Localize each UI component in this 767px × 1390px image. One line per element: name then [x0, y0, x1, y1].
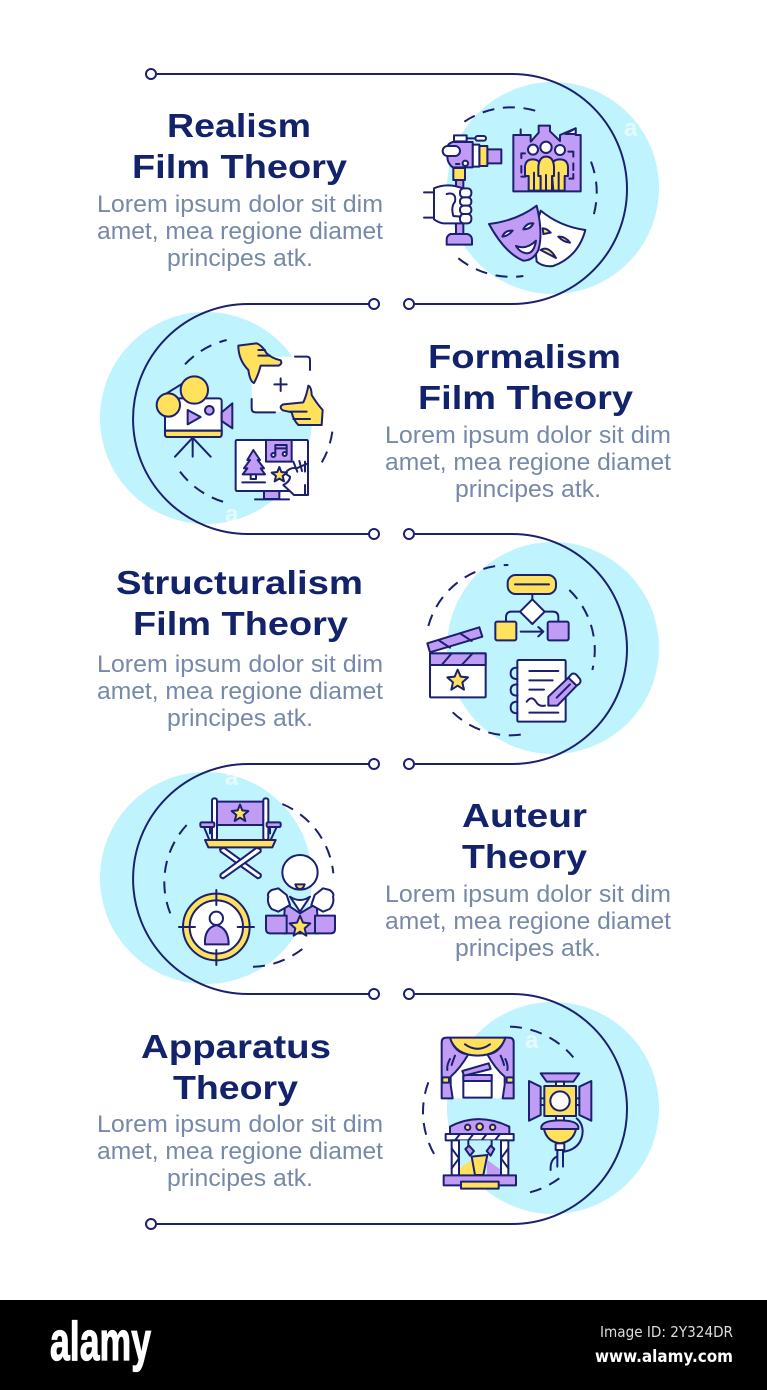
heading — [132, 107, 348, 185]
icon: spotlight — [529, 1073, 591, 1170]
icon: building with audience — [513, 126, 581, 191]
icon: notebook and pencil — [511, 660, 581, 722]
watermarks — [225, 115, 638, 1054]
background circle — [100, 772, 312, 984]
panel: formalism film theory — [100, 299, 671, 539]
watermarks: a — [225, 501, 239, 528]
body text: Lorem ipsum dolor sit dim — [97, 651, 383, 678]
body text — [97, 651, 383, 732]
icon: flowchart — [495, 575, 569, 640]
heading: Film Theory — [418, 379, 634, 416]
connector line — [404, 529, 627, 769]
heading: Film Theory — [132, 148, 348, 185]
watermarks: a — [525, 1027, 539, 1054]
heading: Film Theory — [133, 605, 349, 642]
icon: theatre curtains with clapper — [442, 1038, 514, 1098]
body text: amet, mea regione diamet — [97, 678, 383, 705]
connector line — [133, 759, 379, 999]
background circle — [447, 542, 659, 754]
icon: person with star — [266, 855, 335, 936]
body text — [385, 422, 671, 503]
panel: apparatus theory — [97, 989, 659, 1229]
body text: Lorem ipsum dolor sit dim — [385, 881, 671, 908]
watermarks: a — [225, 764, 239, 791]
connector line — [146, 69, 627, 309]
image id: Image ID: 2Y324DR — [600, 1323, 733, 1341]
body text: Lorem ipsum dolor sit dim — [97, 1111, 383, 1138]
panel: structuralism film theory — [97, 529, 659, 769]
body text — [97, 1111, 383, 1192]
icon: movie camera on tripod — [157, 376, 232, 457]
icon: apparatus cluster — [423, 1027, 591, 1192]
body text: principes atk. — [455, 476, 601, 503]
body text: Lorem ipsum dolor sit dim — [385, 422, 671, 449]
heading: Theory — [173, 1069, 299, 1106]
connector line — [146, 989, 627, 1229]
background circle — [447, 1002, 659, 1214]
icon: monitor with media — [236, 440, 308, 499]
heading: Realism — [167, 107, 311, 144]
watermarks: a — [624, 115, 638, 142]
background circle — [447, 82, 659, 294]
body text: Lorem ipsum dolor sit dim — [97, 191, 383, 218]
icon: realism cluster — [424, 107, 597, 277]
heading — [418, 338, 634, 416]
heading — [462, 797, 588, 875]
icon: structuralism cluster — [427, 565, 595, 735]
body text: principes atk. — [167, 1165, 313, 1192]
heading: Theory — [462, 838, 588, 875]
alamy logo: alamy — [50, 1310, 151, 1372]
body text: amet, mea regione diamet — [97, 218, 383, 245]
heading — [141, 1028, 331, 1106]
heading: Structuralism — [116, 564, 363, 601]
body text: principes atk. — [455, 935, 601, 962]
panel: auteur theory — [100, 759, 671, 999]
heading — [116, 564, 363, 642]
connector line — [133, 299, 379, 539]
body text — [97, 191, 383, 272]
icon: video camera in hand — [424, 135, 501, 245]
body text: amet, mea regione diamet — [97, 1138, 383, 1165]
footer bar — [0, 1300, 767, 1390]
body text: amet, mea regione diamet — [385, 908, 671, 935]
body text: amet, mea regione diamet — [385, 449, 671, 476]
body text: principes atk. — [167, 705, 313, 732]
icon: auteur cluster — [164, 798, 335, 967]
icon: formalism cluster — [157, 340, 332, 502]
panel: realism film theory — [97, 69, 659, 309]
heading: Formalism — [428, 338, 621, 375]
heading: Apparatus — [141, 1028, 331, 1065]
icon: framing hands — [238, 343, 323, 425]
icon: concert stage — [444, 1119, 516, 1189]
background circle — [100, 312, 312, 524]
body text — [385, 881, 671, 962]
icon: theatre masks — [489, 206, 585, 266]
icon: clapperboard — [427, 627, 486, 697]
icon: target on person — [179, 890, 254, 965]
icon: director chair — [200, 798, 281, 878]
body text: principes atk. — [167, 245, 313, 272]
website: www.alamy.com — [595, 1347, 733, 1367]
heading: Auteur — [462, 797, 587, 834]
